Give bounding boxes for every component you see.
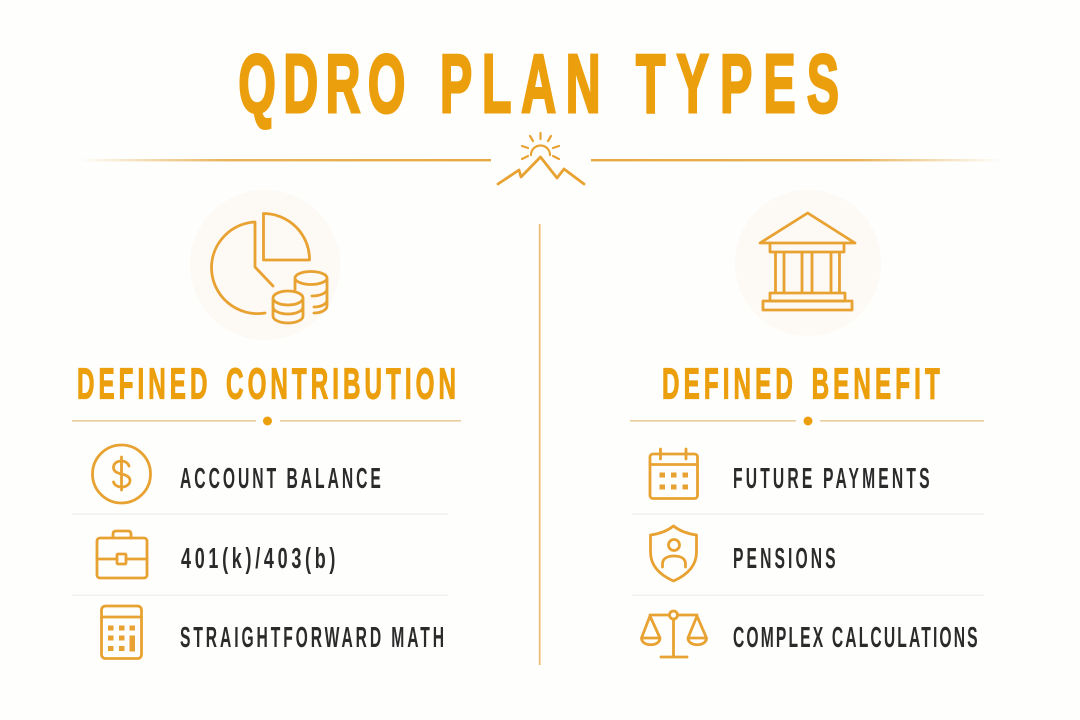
heading rule with dot — [72, 416, 461, 426]
center column divider — [539, 224, 541, 665]
label: 401(k)/403(b) — [181, 543, 335, 575]
heading: defined contribution: DEFINED CONTRIBUTION — [77, 359, 456, 408]
panel: defined contribution — [72, 190, 461, 658]
row: pensions — [650, 526, 836, 581]
title: TYPES — [636, 39, 850, 130]
icon: dollar coin — [92, 445, 150, 503]
title: QDRO — [238, 39, 413, 130]
label: ACCOUNT BALANCE — [180, 462, 381, 494]
icon: bank building — [735, 190, 881, 336]
title: PLAN — [440, 39, 610, 130]
heading: defined benefit: DEFINED BENEFIT — [662, 359, 940, 408]
row: complex calculations — [642, 611, 978, 657]
heading rule with dot — [630, 416, 984, 426]
icon: briefcase — [97, 531, 147, 578]
icon: pie chart with coins — [190, 190, 340, 340]
label: FUTURE PAYMENTS — [733, 462, 930, 494]
row: 401(k)/403(b) — [97, 531, 335, 578]
row: account balance — [92, 445, 381, 503]
panel: defined benefit — [630, 190, 984, 657]
label: COMPLEX CALCULATIONS — [733, 621, 978, 653]
row: future payments — [650, 449, 930, 498]
header divider with sun and mountain emblem — [80, 133, 1001, 184]
icon: calendar — [650, 449, 698, 498]
icon: calculator — [102, 606, 142, 658]
label: STRAIGHTFORWARD MATH — [180, 621, 444, 653]
icon: sun over mountains — [498, 133, 584, 184]
icon: shield with person — [650, 526, 696, 581]
icon: balance scales — [642, 611, 706, 657]
row: straightforward math — [102, 606, 444, 658]
label: PENSIONS — [733, 542, 836, 574]
